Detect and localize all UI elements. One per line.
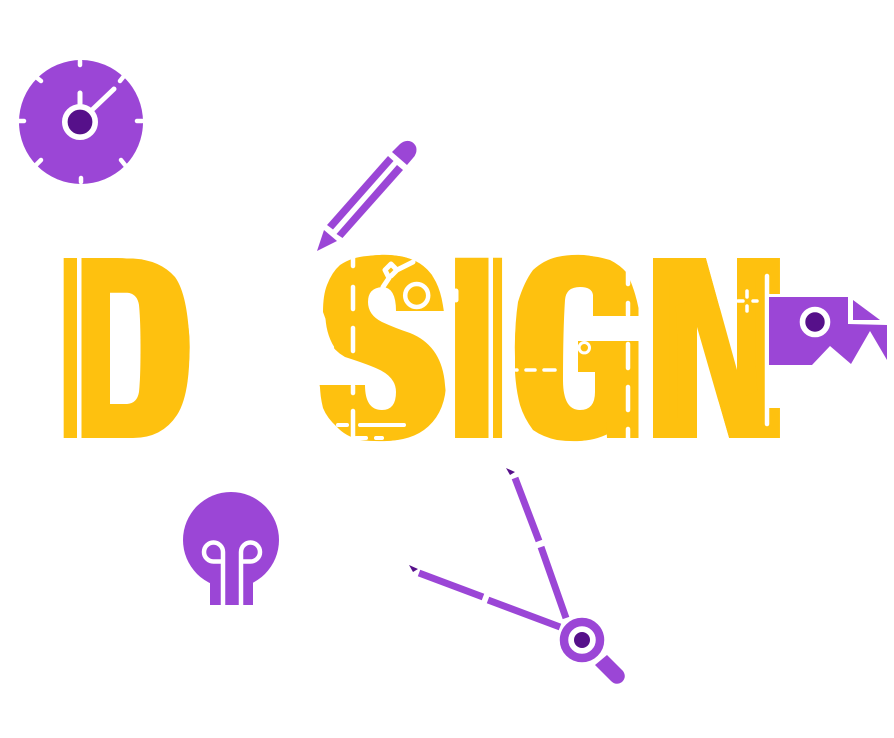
icon: clock dial xyxy=(19,60,143,184)
icon: pencil xyxy=(317,141,416,251)
word: DESIGN letters xyxy=(64,201,805,494)
letter N: N xyxy=(648,217,785,477)
icon: drawing compass xyxy=(409,468,625,684)
white seam lines on letters xyxy=(338,253,767,438)
letter D: D xyxy=(64,227,185,470)
icon: light bulb xyxy=(183,492,279,606)
letter S: S xyxy=(326,224,441,471)
letter G: G xyxy=(519,226,637,472)
letter I: I xyxy=(433,201,524,494)
icon: speech tag with eye xyxy=(769,297,887,365)
